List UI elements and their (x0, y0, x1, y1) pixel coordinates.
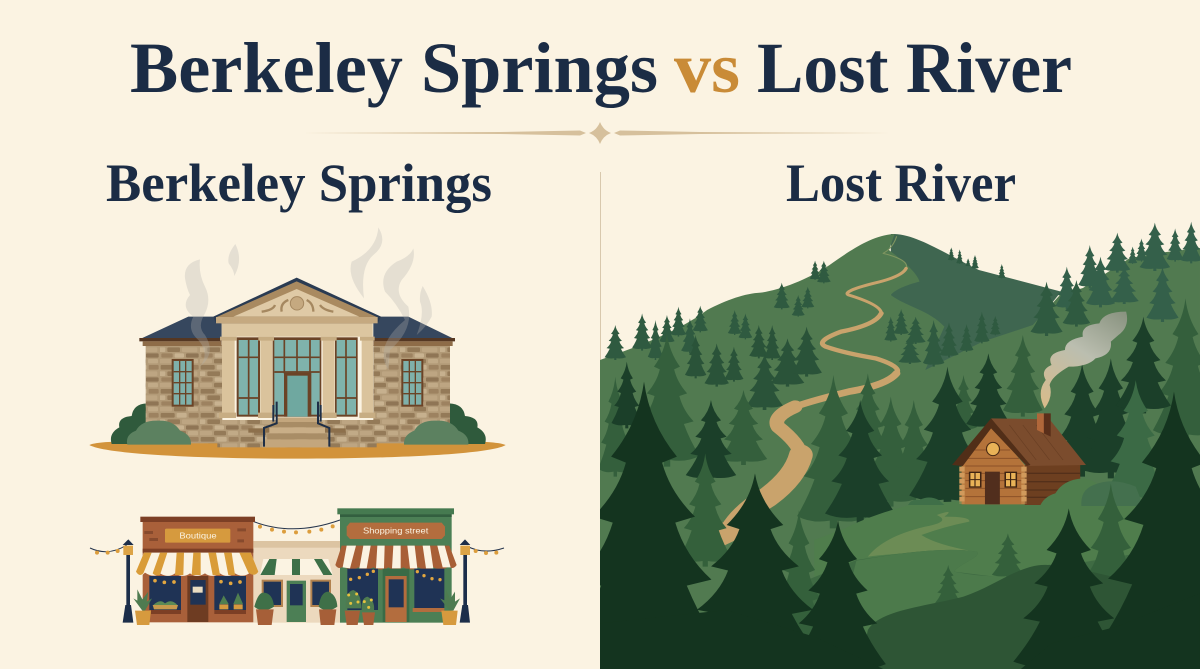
string lights (90, 520, 504, 553)
wing windows (172, 359, 423, 407)
mid-left tree over the trail (679, 453, 825, 643)
ground ellipse (89, 441, 506, 459)
cabin side wall (1025, 465, 1080, 505)
title: vs (674, 28, 740, 108)
left wing (146, 345, 222, 443)
illustration: shopping street (90, 508, 504, 625)
gable round window (986, 442, 999, 456)
entry door (284, 373, 311, 417)
illustration: forest, mountain and cabin (562, 222, 1200, 669)
Boutique shop (136, 517, 258, 622)
cabin door (985, 472, 1000, 504)
back bushes (111, 403, 486, 444)
lower meadow (810, 550, 1129, 606)
center divider line (600, 172, 601, 669)
far treeline on the right (1055, 222, 1200, 322)
steam plumes (185, 227, 432, 370)
entry steps (248, 417, 346, 447)
log cabin (908, 413, 1086, 505)
dark mountain face (890, 234, 1060, 370)
lit meadow path (868, 512, 975, 557)
wing roofs (139, 317, 455, 339)
heading: Lost River: Lost River (786, 153, 1016, 213)
pediment (213, 278, 381, 323)
right wing (373, 345, 450, 443)
cabin roof (991, 418, 1086, 466)
entablature (222, 323, 373, 337)
lower lit meadow patch (854, 550, 1006, 634)
dark foreground mound (867, 564, 1132, 669)
ridge trees (948, 247, 1006, 279)
cabin windows (969, 472, 1017, 488)
foreground dark trees (562, 382, 1200, 669)
chimney (1037, 413, 1044, 433)
medium tree behind shrubs (1110, 380, 1155, 498)
Shopping street awning (335, 546, 457, 569)
Shopping street sign: Shopping street (363, 526, 429, 536)
cabin hill (856, 502, 952, 524)
title: Lost River (757, 28, 1072, 108)
illustration: bathhouse building with steam (89, 227, 506, 459)
medium forest layer (598, 298, 1200, 528)
light mountain slope (600, 234, 1200, 613)
dark forest layer (611, 317, 1171, 523)
stair railings (264, 402, 329, 447)
Shopping street shop (335, 508, 457, 623)
street lamps (123, 539, 470, 623)
cabin front wall (962, 427, 1025, 504)
title (130, 28, 1072, 108)
potted plants (133, 589, 460, 625)
front bushes (127, 421, 468, 445)
meadow saplings (935, 483, 1143, 627)
portico stone base (217, 420, 377, 447)
bushes beside cabin (1040, 478, 1080, 505)
chimney smoke (1041, 312, 1127, 408)
title: Berkeley Springs (130, 28, 658, 108)
small mid-slope trees (605, 261, 1090, 367)
Boutique awning (136, 553, 258, 576)
columns (219, 337, 375, 418)
forested mid trees (685, 325, 822, 410)
Boutique sign: Boutique (179, 530, 217, 540)
ornamental divider (303, 122, 897, 144)
heading: Berkeley Springs: Berkeley Springs (106, 153, 492, 213)
shrubs by cabin (908, 497, 944, 505)
glass panels (237, 337, 358, 417)
winding trail (711, 237, 907, 540)
corner logs (962, 467, 1024, 503)
middle shop (253, 541, 340, 623)
